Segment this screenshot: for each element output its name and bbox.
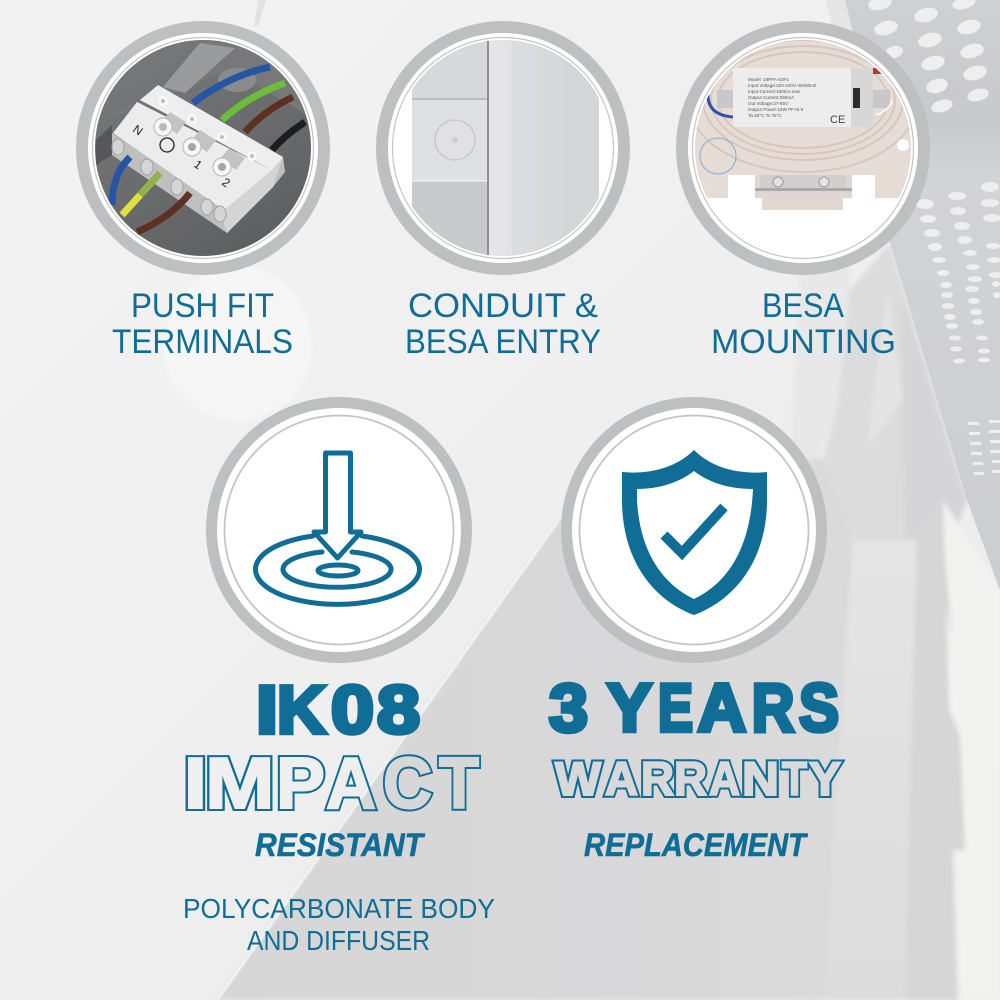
terminal markings xyxy=(132,124,230,188)
driver label text xyxy=(748,77,845,126)
panel: conduit and besa entry xyxy=(376,21,630,325)
label line: mounting: MOUNTING xyxy=(711,323,896,361)
heading: 3 years: S xyxy=(799,670,839,746)
heading: 3 years: E xyxy=(658,670,693,746)
icon: impact target with arrow xyxy=(255,453,419,604)
heading: 3 years: Y xyxy=(607,670,652,746)
heading: 3 years: A xyxy=(698,670,746,746)
label: conduit: CONDUIT & xyxy=(408,287,598,325)
label: push fit terminals: PUSH FIT xyxy=(131,287,274,325)
photo: driver on LED board xyxy=(695,40,911,210)
heading: IMPACT outlined xyxy=(186,754,482,812)
heading: IK08: I xyxy=(256,672,278,748)
panel: besa mounting xyxy=(676,21,930,325)
heading: 3 years: R xyxy=(752,670,794,746)
photo: enclosure with knock-out xyxy=(412,40,599,256)
photo ring xyxy=(676,21,930,275)
driver label text: Output Current:260mA xyxy=(748,95,795,100)
badge: impact icon circle xyxy=(206,397,472,663)
badge: warranty shield circle xyxy=(561,397,827,663)
heading: 3 years: 3 xyxy=(549,670,588,746)
driver label text: Out Voltage:27-65V xyxy=(748,101,789,106)
driver label text: Model: 18PFA-63F1 xyxy=(748,77,789,82)
panel: push fit terminals xyxy=(76,21,330,325)
heading: IK08: K xyxy=(277,672,326,748)
subheading: resistant: RESISTANT xyxy=(255,827,425,863)
heading: IK08: 0 xyxy=(331,672,374,748)
driver label text: Input Current:180mA max xyxy=(748,89,801,94)
driver label text: CE xyxy=(830,114,845,126)
photo ring xyxy=(376,21,630,275)
text: polycarbonate body: POLYCARBONATE BODY xyxy=(183,893,495,924)
heading: warranty outlined xyxy=(551,759,846,798)
terminal markings: 2 xyxy=(219,175,233,190)
photo ring xyxy=(76,21,330,275)
heading: IK08: 8 xyxy=(377,672,420,748)
label line: terminals: TERMINALS xyxy=(112,323,293,361)
photo: wiring terminal block xyxy=(90,35,316,261)
icon: shield with check xyxy=(622,450,767,615)
label: besa: BESA xyxy=(762,287,844,325)
text: and diffuser: AND DIFFUSER xyxy=(247,925,430,956)
driver label text: Input Voltage:220-240V~50/60HZ xyxy=(748,83,817,88)
driver label text: Ta:45°C Tc:75°C xyxy=(748,113,782,118)
terminal markings: 1 xyxy=(191,157,205,172)
driver label text: Output Power:18W PF>0.9 xyxy=(748,107,803,112)
label line: besa entry: BESA ENTRY xyxy=(405,323,601,361)
terminal markings: N xyxy=(130,122,145,138)
subheading: replacement: REPLACEMENT xyxy=(584,827,808,863)
